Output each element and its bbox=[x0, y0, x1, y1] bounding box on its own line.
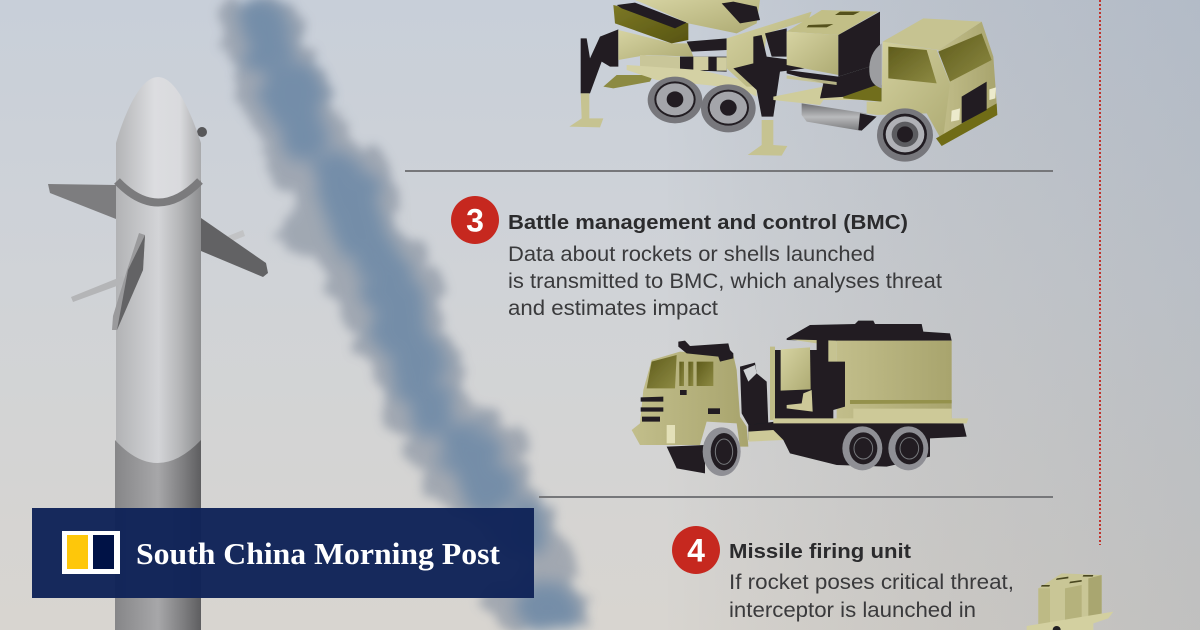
missile (interceptor) bbox=[48, 77, 268, 630]
sensor knob bbox=[197, 127, 207, 137]
cab bbox=[632, 341, 748, 447]
black behind cab bbox=[740, 363, 768, 425]
chassis bbox=[603, 12, 882, 117]
step 3 description: and estimates impact bbox=[508, 297, 718, 320]
step badge 3: 3 bbox=[466, 202, 484, 238]
radar mount bbox=[613, 0, 760, 60]
SCMP logo bbox=[62, 531, 120, 574]
fin: front bbox=[71, 233, 145, 330]
divider 1 bbox=[405, 170, 1053, 172]
cab bbox=[867, 18, 997, 146]
chassis bbox=[667, 418, 968, 473]
SCMP wordmark: South China Morning Post bbox=[136, 536, 501, 571]
machinery block bbox=[770, 340, 845, 420]
container bbox=[790, 339, 952, 421]
nose band bbox=[117, 181, 200, 202]
step 3 heading: Battle management and control (BMC) bbox=[508, 212, 908, 234]
fin: right rear bbox=[201, 218, 268, 277]
stabiliser arm bbox=[581, 29, 618, 93]
step 4 description bbox=[729, 571, 1014, 622]
step 4 description: interceptor is launched in bbox=[729, 599, 976, 622]
rear wheels bbox=[648, 77, 756, 132]
red dotted trajectory line bbox=[1099, 0, 1101, 545]
rocket smoke trail bbox=[217, 0, 590, 630]
fuel tank bbox=[802, 103, 877, 131]
vehicle: BMC truck bbox=[632, 321, 968, 476]
step 4 heading: Missile firing unit bbox=[729, 541, 911, 563]
step 3 description: Data about rockets or shells launched bbox=[508, 243, 875, 266]
vehicle: missile launcher bbox=[1027, 573, 1113, 630]
step 3 description: is transmitted to BMC, which analyses threat bbox=[508, 270, 942, 293]
gray cylinder bbox=[869, 43, 882, 88]
front jack leg bbox=[748, 120, 787, 156]
vehicle: radar truck bbox=[569, 0, 997, 162]
front wheel bbox=[877, 108, 933, 162]
SCMP banner bbox=[32, 508, 534, 598]
nose cone bbox=[116, 77, 201, 201]
fin: left rear bbox=[48, 184, 116, 219]
step 3: battle management and control bbox=[451, 196, 942, 320]
truck wheels bbox=[703, 426, 928, 476]
step 4: missile firing unit bbox=[672, 526, 1014, 622]
missile body lower bbox=[115, 440, 201, 630]
step badge 4 bbox=[672, 526, 720, 574]
step badge 4: 4 bbox=[687, 532, 705, 568]
step 4 description: If rocket poses critical threat, bbox=[729, 571, 1014, 594]
container roof bbox=[787, 321, 952, 341]
divider 2 bbox=[539, 496, 1053, 498]
step badge 3 bbox=[451, 196, 499, 244]
missile body upper bbox=[116, 170, 201, 470]
rear jack leg bbox=[569, 93, 603, 127]
step 3 description bbox=[508, 243, 942, 320]
equipment box bbox=[787, 10, 880, 77]
